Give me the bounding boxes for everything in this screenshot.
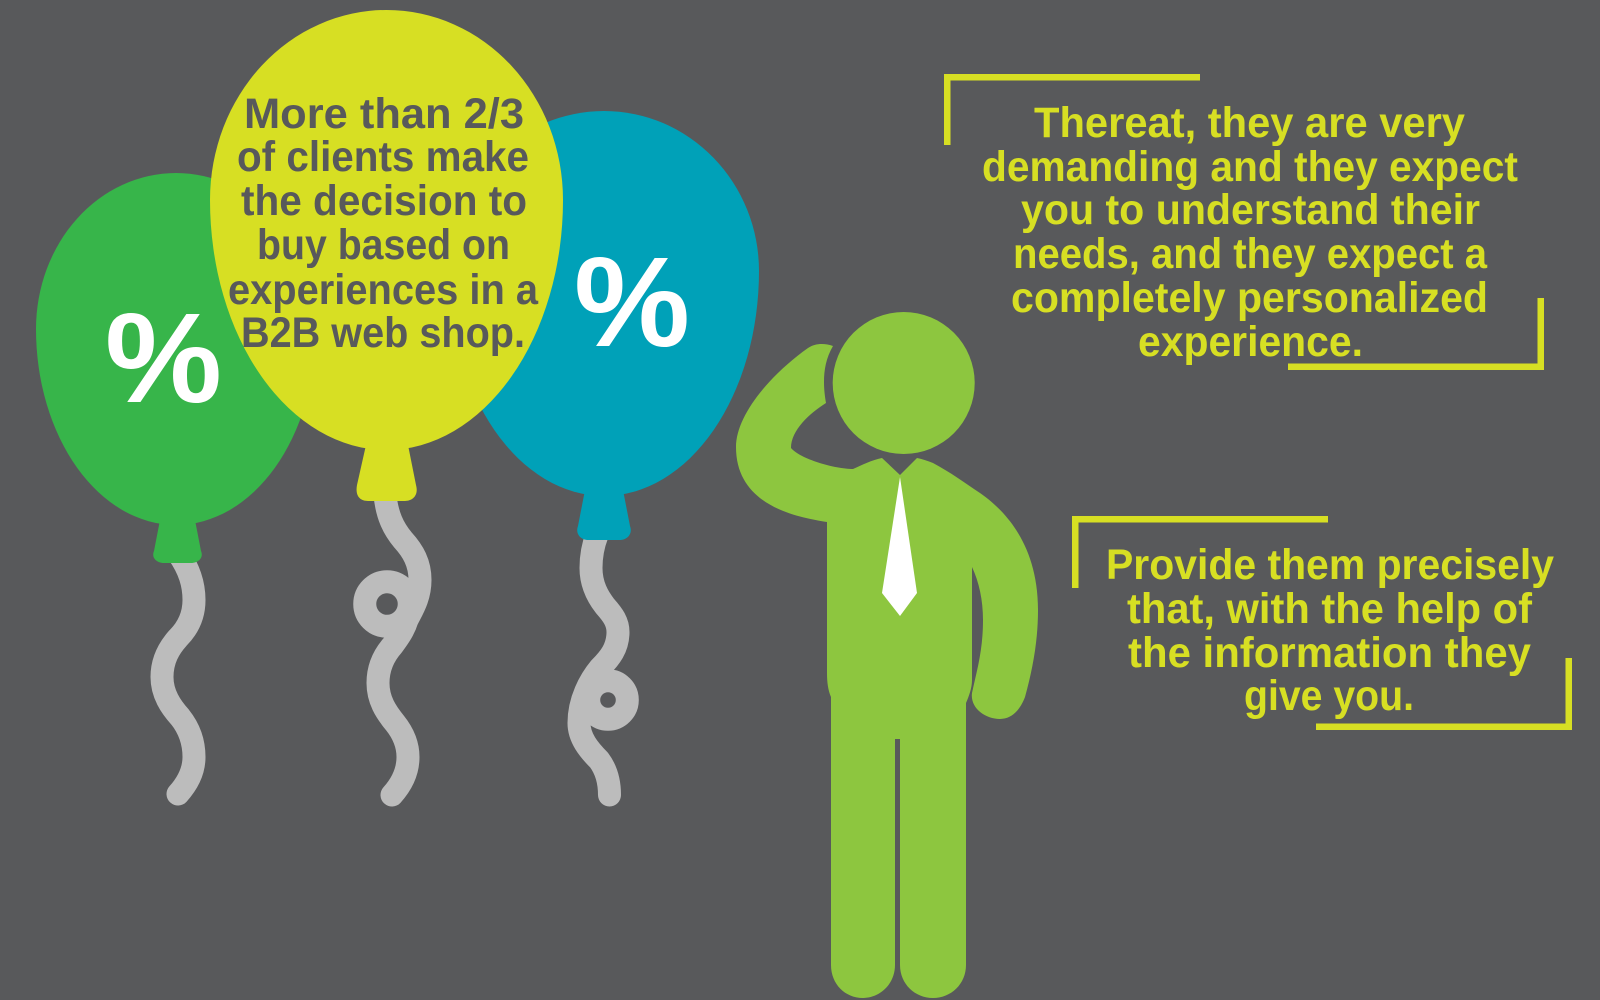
percent sign: teal balloon: % [574, 231, 690, 374]
balloon: yellow [210, 10, 563, 501]
text: demanding clients [982, 99, 1518, 366]
text: balloon statistic [228, 90, 539, 357]
string: green balloon [162, 553, 194, 794]
man: tie [882, 477, 917, 616]
balloon: green [36, 173, 316, 563]
balloon strings [162, 495, 627, 795]
string loop: yellow balloon [365, 582, 409, 626]
text: provide information [1106, 541, 1554, 720]
man: body, arms and legs [736, 344, 1038, 998]
text: provide information: the information they [1128, 629, 1531, 677]
icon: thinking man [736, 312, 1038, 998]
text: balloon statistic: More than 2/3 [244, 90, 524, 138]
string: teal balloon [579, 535, 618, 795]
text: balloon statistic: of clients make [237, 133, 529, 181]
string loop: teal balloon [589, 681, 627, 719]
text: provide information: Provide them precisely [1106, 541, 1554, 589]
bracket: first text top left [944, 74, 1200, 145]
text: provide information: give you. [1244, 672, 1414, 720]
man: head [833, 312, 975, 454]
text: demanding clients: you to understand their [1021, 186, 1480, 234]
text: balloon statistic: buy based on [257, 221, 510, 269]
text: demanding clients: demanding and they expect [982, 143, 1518, 191]
text: demanding clients: needs, and they expect a [1013, 230, 1488, 278]
text: balloon statistic: experiences in a [228, 266, 539, 314]
bracket: first text bottom right [1288, 298, 1544, 370]
text: demanding clients: experience. [1138, 318, 1363, 366]
text: balloon statistic: the decision to [241, 177, 527, 225]
balloon: teal [449, 111, 759, 540]
string: yellow balloon [378, 495, 420, 795]
text: demanding clients: completely personalized [1011, 274, 1488, 322]
text: balloon statistic: B2B web shop. [241, 309, 525, 357]
text: demanding clients: Thereat, they are very [1034, 99, 1465, 147]
text: provide information: that, with the help of [1127, 585, 1533, 633]
bracket: second text top left [1072, 516, 1328, 588]
percent sign: green balloon: % [105, 287, 222, 430]
bracket: second text bottom right [1316, 658, 1572, 730]
